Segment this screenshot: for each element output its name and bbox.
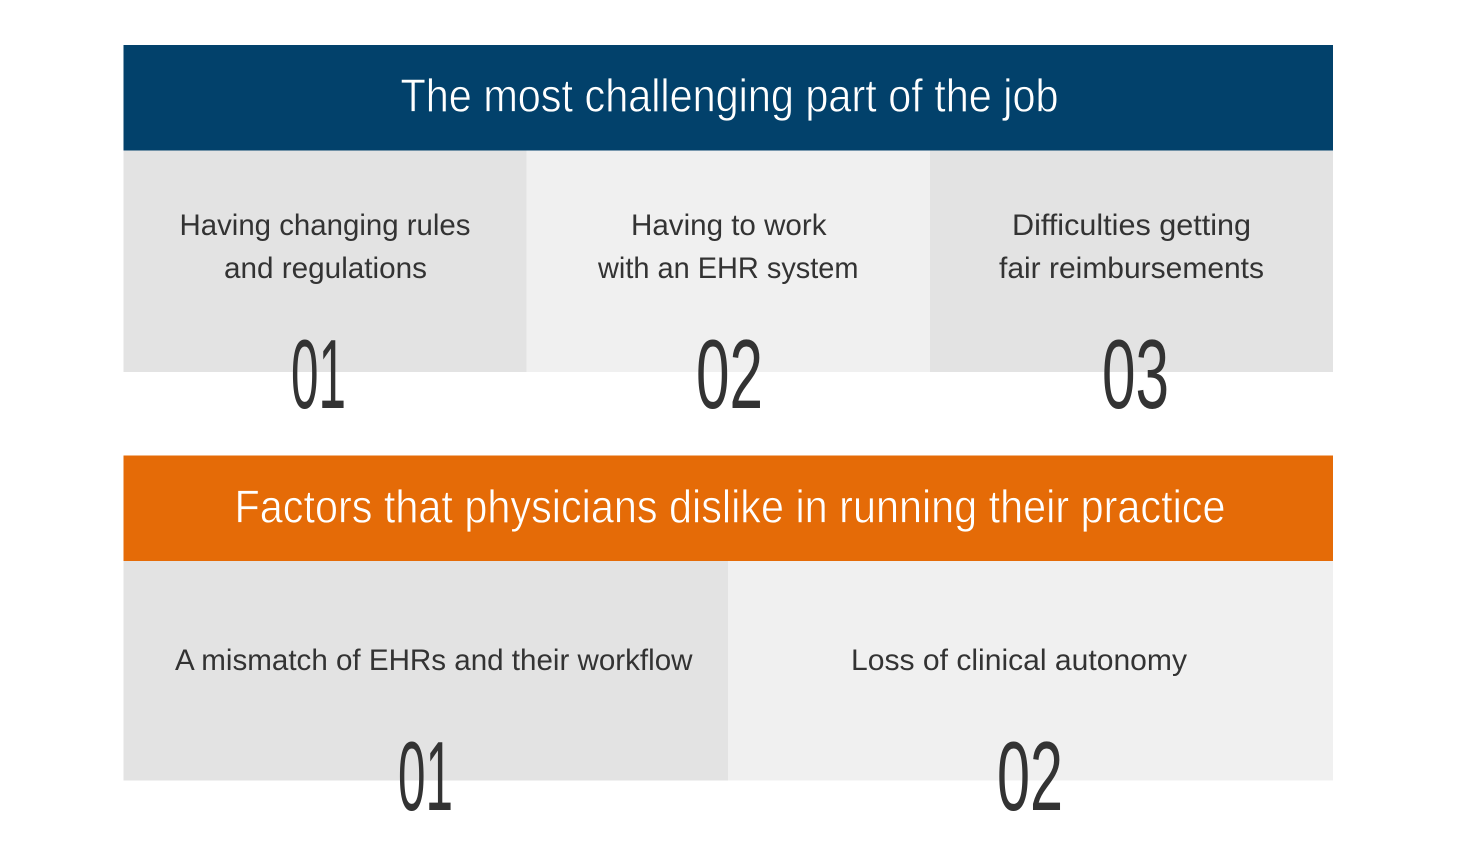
heading: most challenging: The most challenging part of the job xyxy=(400,70,1058,122)
card 2: EHR system: Having to work xyxy=(631,209,827,242)
card 1: changing rules xyxy=(124,150,526,429)
card 2: clinical autonomy: 02 xyxy=(997,721,1063,831)
card 1: changing rules: Having changing rules xyxy=(180,209,470,242)
card 1: changing rules: 01 xyxy=(291,319,346,429)
panel: factors physicians dislike xyxy=(124,456,1333,831)
card 3: reimbursements: fair reimbursements xyxy=(999,252,1264,285)
card 3: reimbursements: Difficulties getting xyxy=(1012,209,1251,242)
card 1: EHR mismatch xyxy=(124,561,728,831)
card 1: changing rules: and regulations xyxy=(224,252,427,285)
card 3: reimbursements xyxy=(930,150,1333,429)
card 3: reimbursements: 03 xyxy=(1102,319,1169,429)
card 2: EHR system: 02 xyxy=(696,319,763,429)
card 2: clinical autonomy xyxy=(728,561,1333,831)
card 2: EHR system xyxy=(526,150,930,429)
card 2: EHR system: with an EHR system xyxy=(597,252,858,285)
header bar: orange xyxy=(124,456,1333,561)
header bar: blue xyxy=(124,45,1333,150)
card 1: EHR mismatch: A mismatch of EHRs and their workflow xyxy=(175,644,693,677)
panel: most challenging part of the job xyxy=(124,45,1333,429)
heading: factors: Factors that physicians dislike in running their practice xyxy=(234,480,1226,532)
card 2: clinical autonomy: Loss of clinical autonomy xyxy=(851,644,1187,677)
card 1: EHR mismatch: 01 xyxy=(398,721,453,831)
